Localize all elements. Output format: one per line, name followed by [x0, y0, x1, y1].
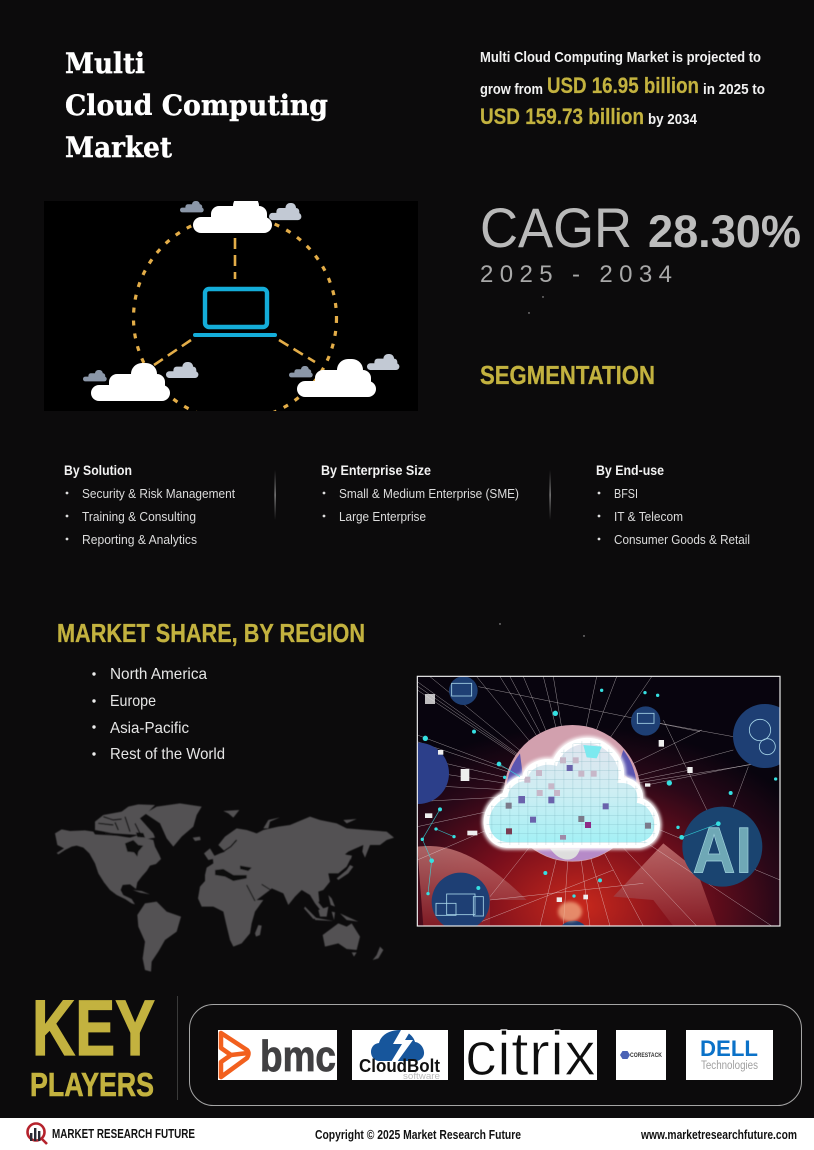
market projection text: USD 16.95 billion	[547, 73, 699, 98]
market projection text: Multi Cloud Computing Market is projected to	[480, 49, 761, 66]
small white icons	[425, 694, 693, 902]
region list	[92, 666, 225, 763]
footer: MARKET RESEARCH FUTURE	[52, 1127, 195, 1141]
segment: by end-use: IT & Telecom	[614, 509, 683, 524]
CAGR value: 28.30%	[648, 206, 801, 257]
logo: citrix: citrix	[465, 1020, 596, 1089]
segment: by enterprise size: By Enterprise Size	[321, 462, 431, 478]
heading: key players	[30, 983, 155, 1103]
panel: key player logos	[190, 1004, 802, 1106]
segment: by end-use	[596, 462, 750, 547]
market projection text	[480, 49, 765, 129]
photo: cloud and AI network	[416, 676, 781, 927]
footer	[0, 1118, 814, 1150]
market projection text: by 2034	[648, 111, 698, 128]
dashed ring	[134, 216, 336, 420]
icon: top cloud group	[180, 201, 302, 233]
segment: by solution: Reporting & Analytics	[82, 532, 197, 547]
world map	[55, 803, 394, 972]
title: Market	[65, 131, 172, 164]
segment: by end-use: BFSI	[614, 486, 638, 501]
dashed connectors	[154, 238, 315, 365]
title	[65, 47, 328, 164]
segment: by enterprise size: Small & Medium Enterprise (SME)	[339, 486, 519, 501]
logo: Dell Technologies: DELL	[700, 1036, 758, 1061]
logo: bmc	[218, 1030, 337, 1081]
side circles	[418, 676, 780, 926]
market projection text: grow from	[480, 81, 543, 98]
segment: by end-use: Consumer Goods & Retail	[614, 532, 750, 547]
icon: Market Research Future logo	[28, 1124, 47, 1144]
heading: key players: KEY	[32, 983, 155, 1072]
device outlines	[436, 683, 775, 916]
segment: by enterprise size	[321, 462, 519, 524]
icon: right cloud group	[289, 354, 399, 397]
heading: key players: PLAYERS	[30, 1066, 154, 1103]
illustration: laptop connected to clouds	[44, 195, 418, 420]
region list: North America	[110, 666, 207, 683]
Europe, Asia, Africa and Oceania	[198, 810, 394, 960]
logo: Dell Technologies: Technologies	[701, 1060, 758, 1072]
CAGR period: 2025 - 2034	[480, 261, 672, 288]
icon: left cloud group	[83, 362, 198, 401]
segment: by solution: Security & Risk Management	[82, 486, 235, 501]
logo: CoreStack: CORESTACK	[630, 1053, 663, 1059]
Americas and Greenland	[55, 803, 202, 972]
logo: bmc: bmc	[260, 1032, 336, 1081]
network lines	[417, 677, 780, 926]
title: Cloud Computing	[65, 89, 328, 122]
CAGR value: CAGR	[480, 196, 632, 259]
AI circle	[682, 807, 762, 887]
region list: Europe	[110, 693, 156, 710]
segment: by end-use: By End-use	[596, 462, 664, 478]
logo: CoreStack	[616, 1030, 666, 1080]
title: Multi	[65, 47, 145, 80]
market projection text: USD 159.73 billion	[480, 104, 644, 129]
CAGR value	[480, 196, 801, 259]
cyan nodes	[421, 689, 777, 898]
segment: by solution: Training & Consulting	[82, 509, 196, 524]
logo: Dell Technologies	[686, 1030, 773, 1080]
globe	[504, 725, 641, 862]
heading: market share by region: MARKET SHARE, BY REGION	[57, 618, 365, 648]
footer: Copyright © 2025 Market Research Future	[315, 1128, 521, 1142]
heading: segmentation: SEGMENTATION	[480, 360, 655, 390]
icon: laptop	[195, 289, 275, 335]
segment: by solution: By Solution	[64, 462, 132, 478]
cloud	[486, 741, 657, 845]
segment: by enterprise size: Large Enterprise	[339, 509, 426, 524]
AI text: AI	[693, 813, 752, 886]
region list: Rest of the World	[110, 746, 225, 763]
region list: Asia-Pacific	[110, 720, 189, 737]
hands	[417, 843, 717, 926]
segment: by solution	[64, 462, 235, 547]
logo: CloudBolt: software	[403, 1071, 440, 1081]
logo: CloudBolt: CloudBolt	[359, 1056, 440, 1076]
market projection text: in 2025 to	[703, 81, 765, 98]
specks	[499, 296, 585, 637]
logo: CloudBolt	[352, 1030, 448, 1081]
